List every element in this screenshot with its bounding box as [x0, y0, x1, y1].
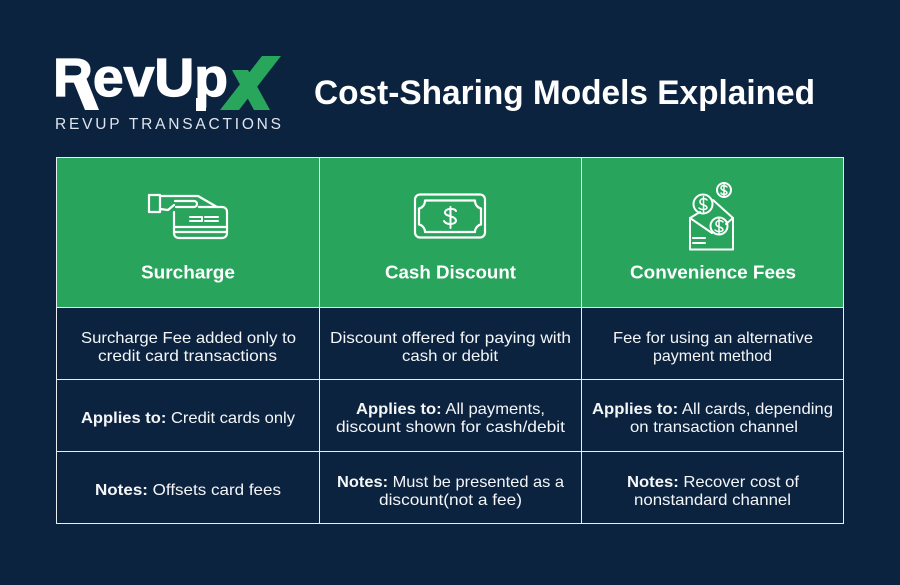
surcharge description: credit card transactions [98, 348, 277, 365]
panel: surcharge header [141, 195, 235, 282]
icon: envelope with coins [690, 183, 733, 250]
convenience fee applies to: Applies to: All cards, depending [592, 401, 833, 418]
convenience fee applies to: on transaction channel [630, 419, 798, 436]
row: notes [95, 474, 800, 509]
surcharge description [81, 330, 296, 365]
panel: cash discount header [385, 194, 516, 282]
logo green X [220, 56, 281, 110]
logo tagline: REVUP TRANSACTIONS [55, 116, 281, 133]
title: Cost-Sharing Models Explained [314, 74, 815, 112]
convenience fee notes [627, 474, 800, 509]
icon: banknote [415, 194, 485, 238]
cash discount applies to: Applies to: All payments, [356, 401, 545, 418]
logo p descender [196, 98, 206, 111]
row: applies to [81, 401, 833, 436]
grid lines [56, 158, 844, 524]
cash discount description [330, 330, 571, 365]
convenience fee applies to [592, 401, 833, 436]
heading: Surcharge: Surcharge [141, 262, 235, 282]
green header band [56, 158, 844, 308]
cash discount notes: discount(not a fee) [379, 492, 522, 509]
row: description [81, 330, 813, 365]
logo R leg [72, 75, 99, 110]
heading: Convenience Fees: Convenience Fees [630, 262, 796, 282]
logo: RevUpX [53, 48, 281, 133]
convenience fee description [613, 330, 813, 365]
convenience fee notes: Notes: Recover cost of [627, 474, 800, 491]
cash discount description: Discount offered for paying with [330, 330, 571, 347]
convenience fee description: payment method [653, 348, 772, 365]
surcharge notes: Notes: Offsets card fees [95, 482, 281, 499]
convenience fee notes: nonstandard channel [634, 492, 791, 509]
cash discount applies to: discount shown for cash/debit [336, 419, 566, 436]
heading: Cash Discount: Cash Discount [385, 262, 516, 282]
convenience fee description: Fee for using an alternative [613, 330, 813, 347]
icon: hand holding card [149, 195, 227, 238]
cash discount notes: Notes: Must be presented as a [337, 474, 564, 491]
logo wordmark: RevUp [53, 48, 228, 108]
surcharge description: Surcharge Fee added only to [81, 330, 296, 347]
cash discount applies to [336, 401, 566, 436]
cash discount description: cash or debit [402, 348, 499, 365]
cash discount notes [337, 474, 564, 509]
panel: convenience fees header [630, 183, 796, 282]
surcharge applies to: Applies to: Credit cards only [81, 410, 295, 427]
table [56, 158, 844, 524]
